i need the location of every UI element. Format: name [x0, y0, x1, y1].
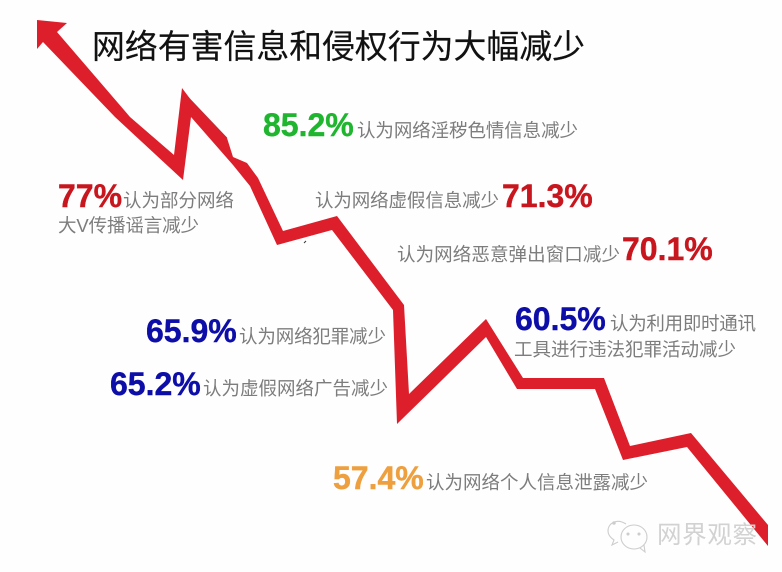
stat: 71.3% false info [315, 178, 593, 214]
stat: 71.3% false info: 71.3% [502, 178, 593, 214]
stat: 71.3% false info: 认为网络虚假信息减少 [315, 190, 499, 211]
stat: 65.9% cybercrime: 认为网络犯罪减少 [239, 326, 386, 347]
stat: 77% rumours by big V accounts: 认为部分网络 [123, 190, 234, 211]
stat: 57.4% personal info leaks: 认为网络个人信息泄露减少 [426, 472, 648, 493]
stat: 65.2% fake ads: 65.2% [110, 366, 201, 402]
stat: 57.4% personal info leaks: 57.4% [333, 460, 424, 496]
stat: 65.2% fake ads [110, 366, 388, 402]
stat: 60.5% instant messaging crime: 认为利用即时通讯 [610, 313, 756, 334]
icon: chat bubbles watermark [608, 521, 647, 552]
stat: 65.2% fake ads: 认为虚假网络广告减少 [203, 378, 388, 399]
stat: 70.1% pop-up windows: 认为网络恶意弹出窗口减少 [397, 244, 620, 265]
title: 网络有害信息和侵权行为大幅减少 [92, 28, 585, 65]
stat: 65.9% cybercrime: 65.9% [146, 313, 237, 349]
stat: 60.5% instant messaging crime: 工具进行违法犯罪活动减少 [514, 339, 736, 360]
stat: 85.2% pornographic info [263, 107, 578, 143]
stat: 77% rumours by big V accounts [58, 178, 234, 236]
stat: 70.1% pop-up windows [397, 231, 713, 267]
stat: 57.4% personal info leaks [333, 460, 648, 496]
stat: 65.9% cybercrime [146, 313, 386, 349]
stat: 77% rumours by big V accounts: 大V传播谣言减少 [58, 215, 199, 236]
stat: 77% rumours by big V accounts: 77% [58, 178, 122, 214]
stat: 60.5% instant messaging crime [514, 301, 756, 360]
stat: 85.2% pornographic info: 85.2% [263, 107, 354, 143]
stat: 85.2% pornographic info: 认为网络淫秽色情信息减少 [357, 120, 578, 141]
stat: 60.5% instant messaging crime: 60.5% [515, 301, 606, 337]
stat: 70.1% pop-up windows: 70.1% [622, 231, 713, 267]
watermark text: 网界观察 [657, 521, 757, 549]
